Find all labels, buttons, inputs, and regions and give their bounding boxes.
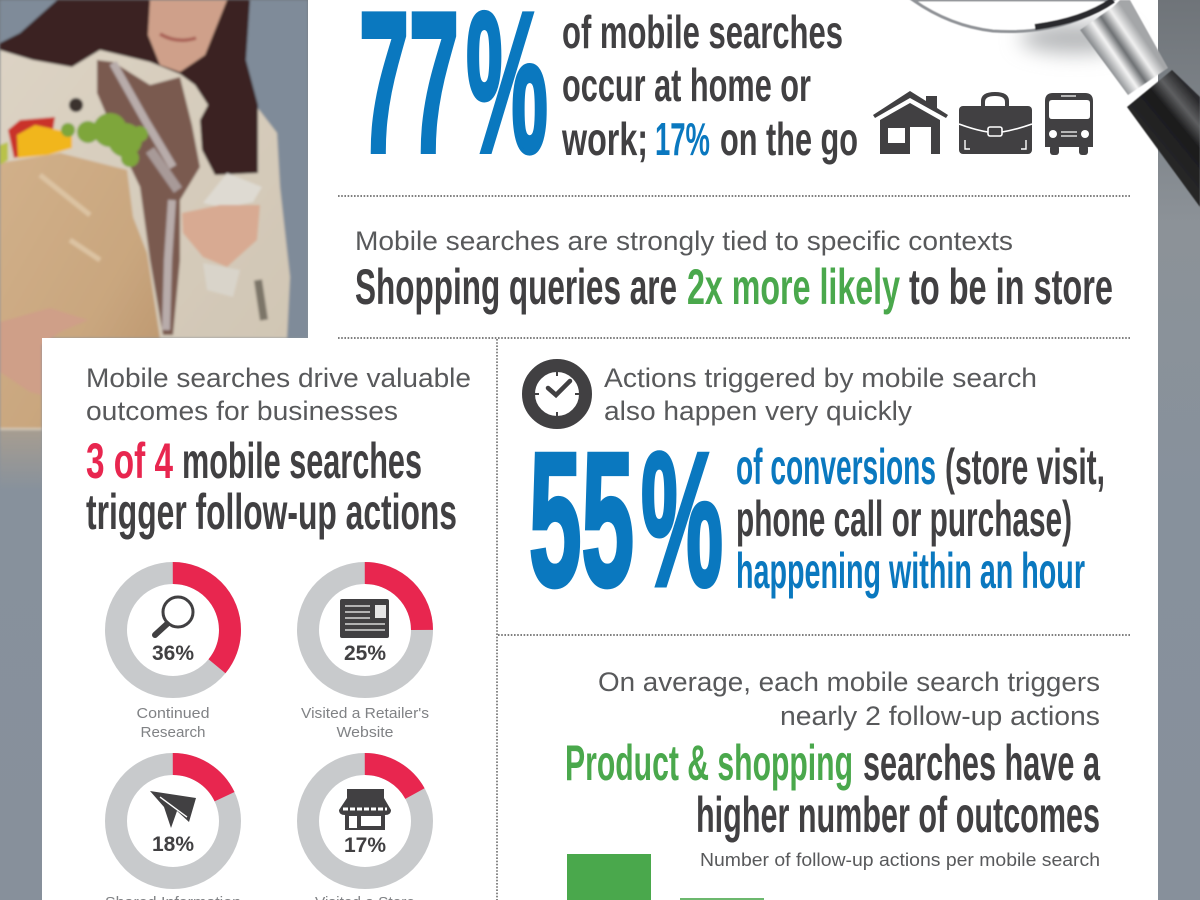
headline: product and shopping searches [565,735,1101,843]
lettuce [61,113,148,167]
subheading: nearly 2 follow-up actions: On average, each mobile search triggers [598,667,1100,697]
icon: clock [528,366,586,422]
section: shopping queries in store [355,226,1113,315]
headline: 3 of 4: 3 of 4 [86,433,173,489]
lens ring [913,0,1113,32]
donut: visited a retailer's website 25% [301,573,429,741]
headline: 3 of 4: trigger follow-up actions [86,484,457,540]
black handle [1127,70,1200,207]
icon: bus [1045,93,1093,155]
headline: shopping queries: Shopping queries are [355,259,677,315]
donut: visited a store 17%: 17% [344,834,386,857]
subheading: nearly 2 follow-up actions: nearly 2 follow-up actions [780,701,1100,731]
donut: continued research 36%: Research [140,724,206,741]
bar chart: follow-up actions [567,854,764,900]
stat text: location of mobile searches: on the go [720,113,858,165]
photo: woman with groceries searching on phone [0,0,308,490]
headline: 3 of 4 [86,433,457,540]
donut: shared information 18%: 18% [152,833,194,856]
donut: shared information 18% [105,764,241,900]
text: % [641,414,723,626]
icon: house [873,91,948,154]
donut: visited a retailer's website 25%: 25% [344,642,386,665]
metal collar [1080,0,1168,95]
donut: continued research 36%: 36% [152,642,194,665]
stat text: location of mobile searches: of mobile searches [562,6,843,58]
donut: visited a retailer's website 25%: Visited a Retailer's [301,705,429,722]
stat text: location of mobile searches: occur at home or [562,59,811,111]
subheading: specific contexts: Mobile searches are strongly tied to specific contexts [355,226,1013,256]
icon: newspaper [340,599,389,638]
stat text: conversions within an hour [736,439,1105,599]
magnifying glass [913,0,1200,207]
donut: visited a store 17% [308,764,422,900]
icon: storefront [339,789,391,830]
stat text: conversions within an hour: of conversions [736,439,936,495]
donut: visited a retailer's website 25%: Website [336,724,394,741]
icon: briefcase [959,92,1032,154]
stat text: location of mobile searches: work; [561,113,648,165]
subheading: actions happen quickly: Actions triggered by mobile search [604,363,1037,393]
subheading: nearly 2 follow-up actions [598,667,1100,731]
subheading: valuable outcomes [86,363,471,426]
subheading: actions happen quickly [604,363,1037,426]
icon: paper plane [150,791,196,828]
icon: magnifier [155,597,193,635]
donut: continued research 36% [116,573,230,741]
subheading: actions happen quickly: also happen very quickly [604,396,913,426]
headline: product and shopping searches: Product & shopping [565,735,853,791]
section: valuable outcomes [86,363,471,540]
stat text: location of mobile searches: 17% [655,113,710,165]
headline: shopping queries [355,259,1113,315]
headline: 3 of 4: mobile searches [182,433,422,489]
donut: continued research 36%: Continued [136,705,210,722]
stat text: location of mobile searches [561,6,858,165]
subheading: valuable outcomes: outcomes for businesses [86,396,398,426]
headline: shopping queries: 2x more likely [687,259,900,315]
big stat: 55%: 55 [529,414,634,626]
chart caption: Number of follow-up actions per mobile search [700,850,1100,870]
subheading: valuable outcomes: Mobile searches drive valuable [86,363,471,393]
